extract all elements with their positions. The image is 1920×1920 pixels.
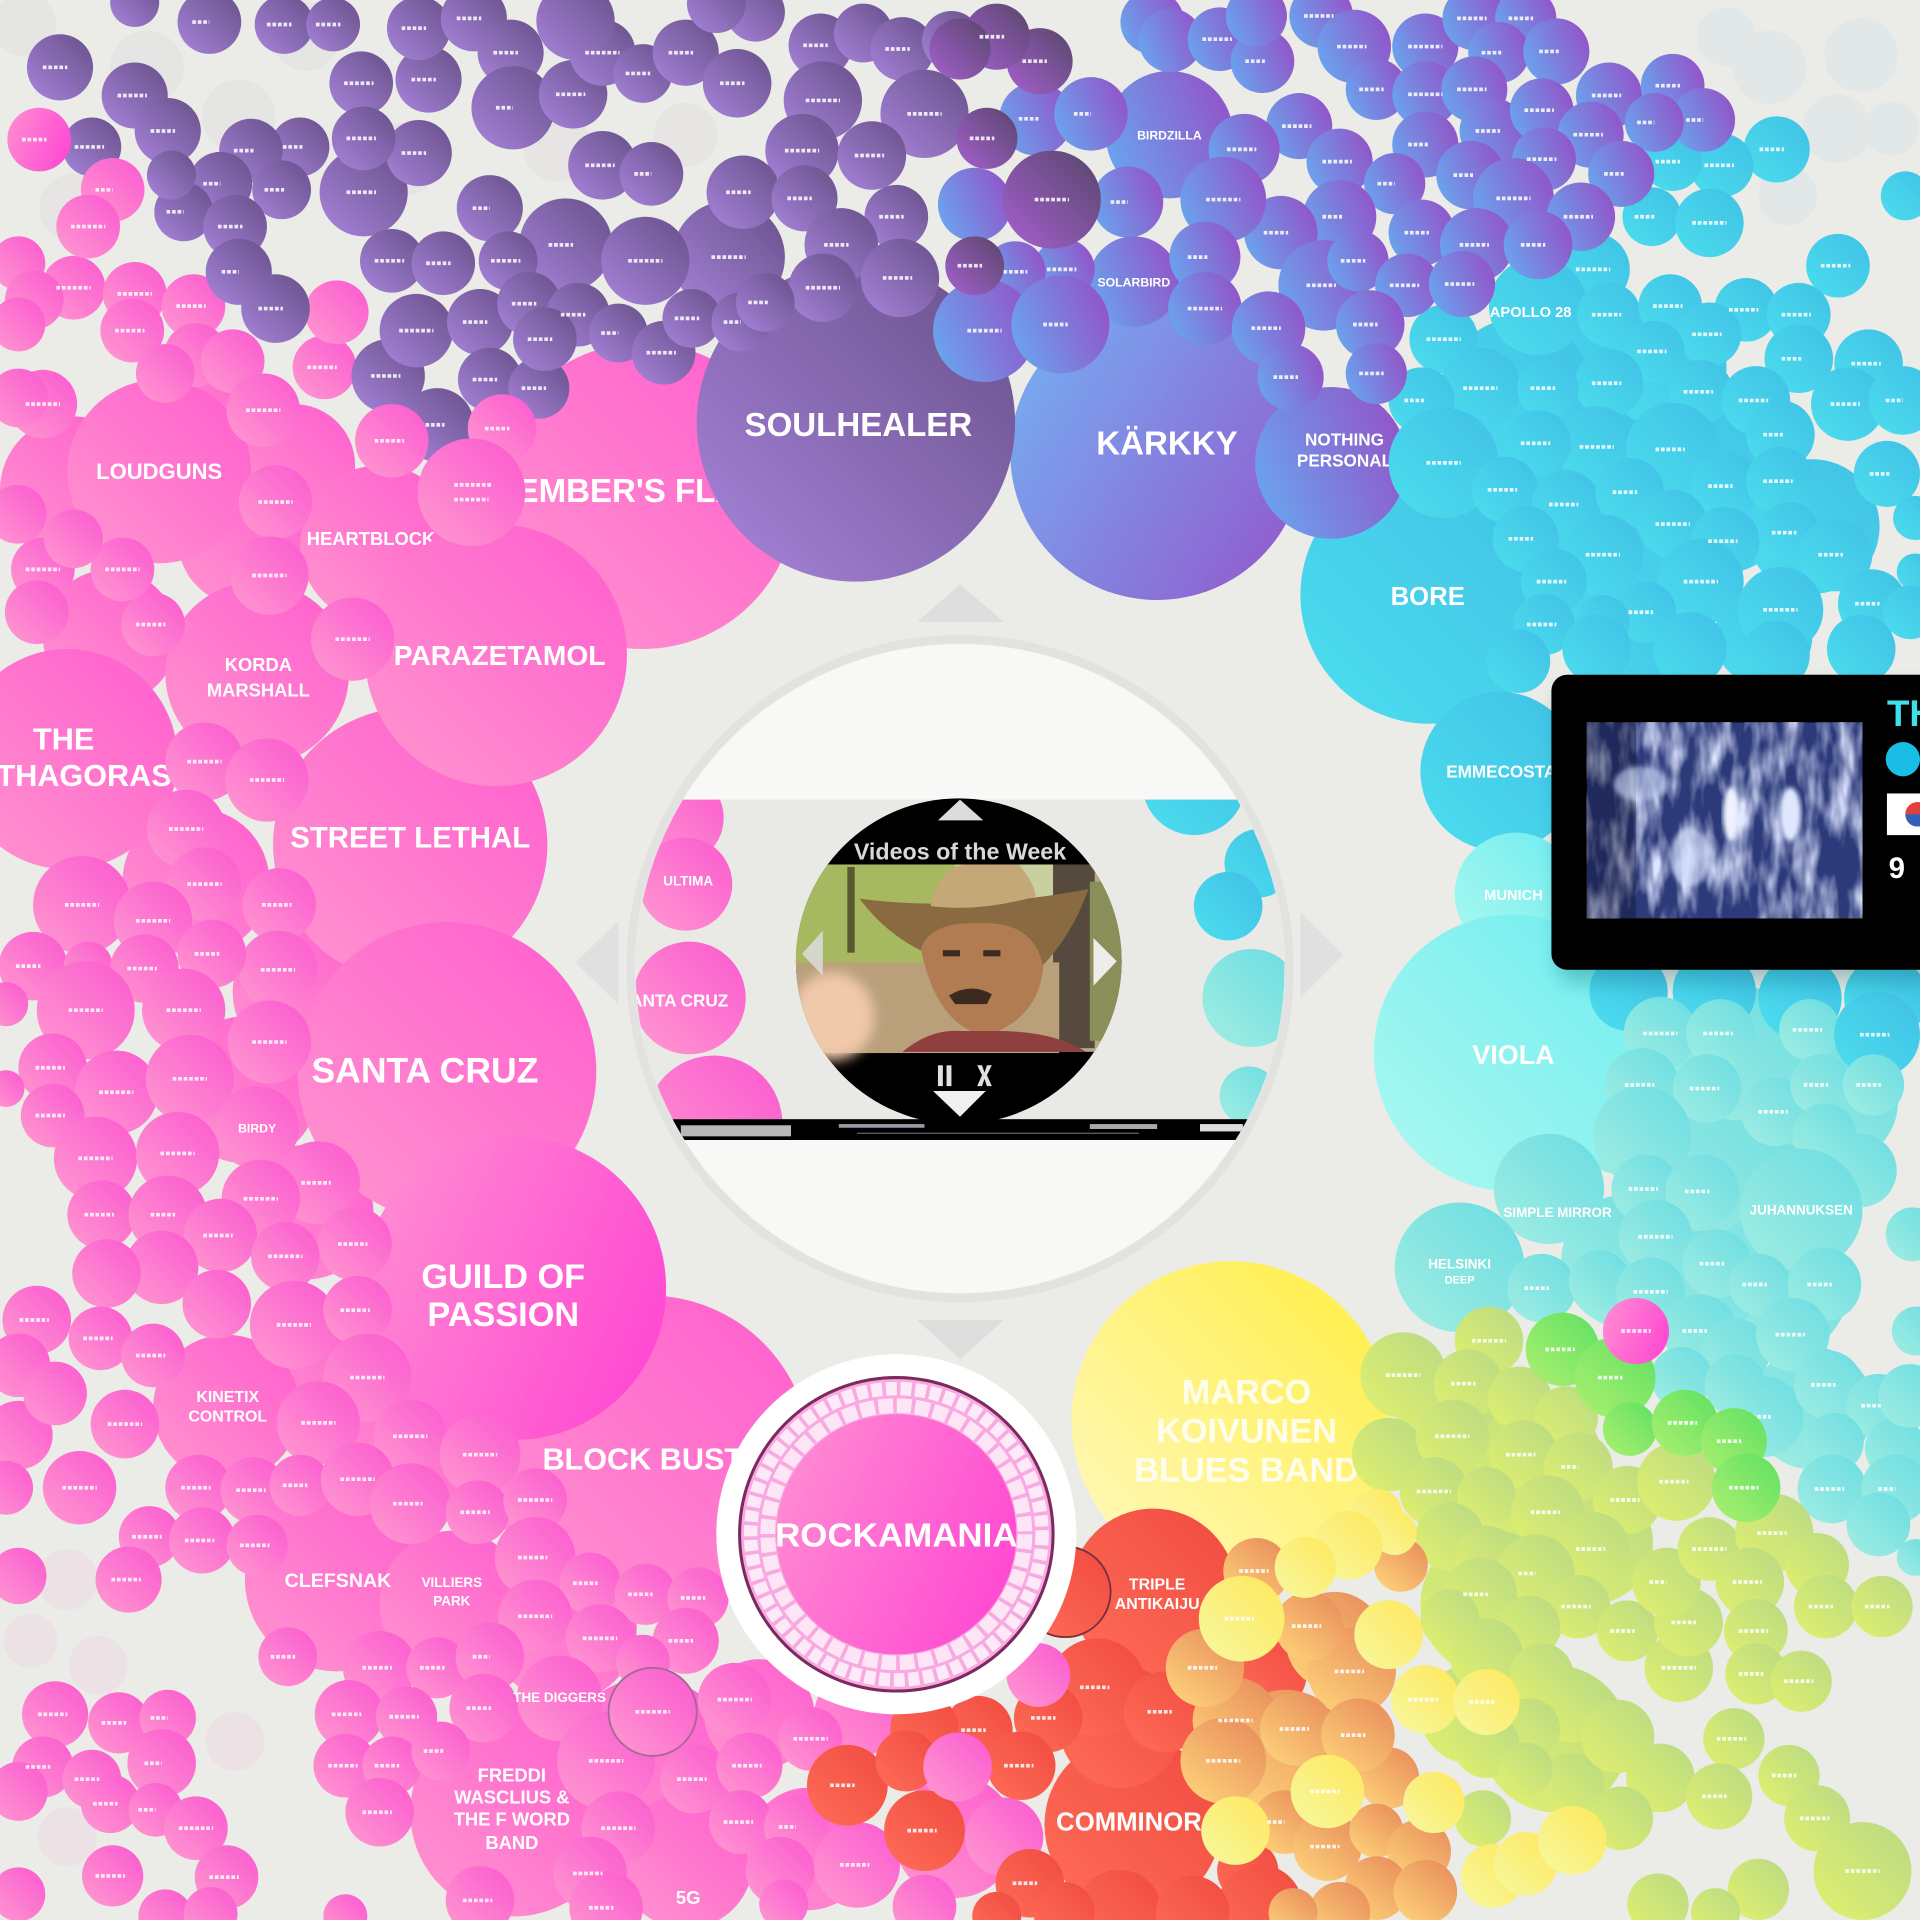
bubble: Emmecosta: EMMECOSTA	[1446, 762, 1556, 782]
bubble: Street Lethal: STREET LETHAL	[290, 821, 530, 854]
bubble: Block Busters: BLOCK BUSTERS	[542, 1442, 806, 1476]
player next arrow	[1093, 938, 1117, 986]
bubble: Nothing Personal: NOTHING	[1305, 430, 1384, 450]
small band names: pink: 5G	[676, 1887, 700, 1908]
purple small bubbles	[27, 0, 981, 462]
small band names: blue-violet: BIRDZILLA	[1137, 129, 1202, 143]
highlighted outlined pink bubble	[609, 1668, 697, 1756]
inner video band: SANTA CRUZ	[619, 991, 728, 1011]
tiny label marks: cyan bubbles	[1404, 149, 1903, 624]
mid-size teal names	[1428, 1203, 1853, 1286]
tiny label marks: overlapping pink bubbles	[22, 140, 509, 500]
bubble: Emmecosta	[1420, 692, 1580, 851]
bubble: Freddi Wasclius	[410, 1708, 618, 1916]
filler teal mass	[1555, 986, 1898, 1469]
filler mid-size pink bubbles	[0, 355, 1016, 1920]
small band name: Apollo 28: APOLLO 28	[1490, 305, 1571, 321]
filler yellow-green mass	[1396, 1359, 1653, 1812]
bubble: Bore: BORE	[1391, 583, 1465, 611]
bubble: Korda Marshall: MARSHALL	[207, 680, 310, 701]
bubble: Triple Antikaiju: TRIPLE	[1129, 1576, 1185, 1593]
bubble: Soulhealer	[697, 263, 1015, 582]
bubble: Korda Marshall: KORDA	[225, 654, 292, 675]
tiny label marks: warm and green bubbles	[830, 1341, 1889, 1883]
bright magenta bubble	[1603, 1298, 1669, 1364]
outlined red bubble behind Rockamania	[1020, 1547, 1111, 1637]
tiny label marks: purple bubbles	[43, 18, 1069, 425]
mid-size teal names: SIMPLE MIRROR	[1503, 1205, 1612, 1220]
bubble: Villiers Park: VILLIERS	[422, 1575, 482, 1590]
pink bubble among the reds	[923, 1733, 992, 1801]
bubble: Soulhealer: SOULHEALER	[745, 407, 972, 444]
bubble: Villiers Park: PARK	[433, 1593, 471, 1608]
bubble: Santa Cruz	[298, 922, 596, 1221]
bubble: Freddi Wasclius: FREDDI	[478, 1765, 546, 1786]
bubble: Kärkky	[1010, 306, 1304, 600]
bubble: Ember's Flame	[490, 343, 796, 649]
mid-size teal names: HELSINKI	[1428, 1257, 1491, 1272]
cyan and teal big bubbles	[1300, 294, 1898, 1469]
tooltip thumbnail	[1587, 722, 1862, 918]
small red bubbles	[807, 1638, 1307, 1920]
small orange bubbles	[1166, 1538, 1457, 1920]
ghost bubbles: faded blue	[1697, 7, 1919, 225]
bubble: Marco Koivunen Blues Band: MARCO	[1182, 1373, 1311, 1411]
bubble: Parazetamol	[365, 524, 627, 786]
filler cyan mass	[1445, 294, 1880, 698]
bubble: Marco Koivunen Blues Band: KOIVUNEN	[1156, 1412, 1337, 1450]
bubble: Nothing Personal	[1255, 387, 1407, 539]
bubble: Clefsnak	[245, 1488, 429, 1671]
inner video band	[636, 800, 1284, 1140]
small bright green bubbles	[1526, 1313, 1780, 1522]
pink bubbles lying over the purple cluster	[7, 108, 536, 546]
filler orange mass	[1224, 1592, 1384, 1812]
small band names: pink: THE DIGGERS	[513, 1690, 606, 1705]
bubble: Freddi Wasclius: WASCLIUS &	[454, 1787, 569, 1808]
bubble: Korda Marshall	[165, 582, 349, 765]
tooltip card	[1551, 675, 1920, 982]
bubble: Loudguns	[67, 380, 251, 563]
Rockamania featured bubble: ROCKAMANIA	[775, 1518, 1018, 1555]
player title: Videos of the Week	[854, 839, 1066, 865]
bubble: Guild of Passion: PASSION	[427, 1296, 579, 1334]
video frame: man in cowboy hat	[784, 864, 1139, 1060]
bubble: Loudguns: LOUDGUNS	[96, 459, 222, 484]
bubble: Marco Koivunen Blues Band: BLUES BAND	[1134, 1452, 1359, 1490]
bubble: Viola: VIOLA	[1472, 1040, 1555, 1070]
mid-size teal names: JUHANNUKSEN	[1750, 1203, 1853, 1218]
name: Clefsnak: CLEFSNAK	[285, 1570, 391, 1592]
small band names: blue-violet: SOLARBIRD	[1098, 276, 1170, 290]
mid-size teal names: DEEP	[1445, 1274, 1475, 1286]
bubble: Freddi Wasclius: THE F WORD	[454, 1809, 570, 1830]
bubble: The Pythagoras	[0, 649, 178, 869]
bubble: Santa Cruz: SANTA CRUZ	[312, 1050, 538, 1090]
tiny label marks: blue-violet bubbles	[967, 16, 1703, 377]
bubble: Villiers Park	[380, 1531, 527, 1678]
bubble: Heartblock: HEARTBLOCK	[307, 528, 436, 549]
bubble: Bore	[1300, 467, 1558, 724]
bubble: Guild of Passion	[362, 1136, 666, 1440]
Rockamania featured bubble	[716, 1354, 1076, 1714]
bubble: Kinetix Control	[153, 1335, 300, 1482]
player previous arrow	[802, 931, 823, 976]
media player bar	[661, 1119, 1261, 1140]
ghost bubbles: faded purple	[0, 0, 718, 242]
player down arrow	[933, 1091, 986, 1117]
bubble: Comminor	[1044, 1665, 1221, 1913]
bubble: Kinetix Control: KINETIX	[196, 1389, 260, 1406]
bubble: Ember's Flame: EMBER'S FLAME	[517, 473, 789, 510]
blue-violet small bubbles	[933, 0, 1735, 410]
small band names: pink: BIRDY	[238, 1122, 276, 1136]
small yellow-green bubbles	[1352, 1307, 1913, 1920]
bubble: Munich: MUNICH	[1484, 888, 1543, 904]
pink bubble under Rockamania	[1007, 1643, 1070, 1707]
bubble: Marco Koivunen Blues Band	[1071, 1261, 1390, 1580]
bubble: Triple Antikaiju: ANTIKAIJU	[1115, 1596, 1200, 1613]
big pink bubbles with names	[0, 343, 1016, 1920]
arrow: top navigation ghost	[917, 584, 1004, 622]
bubble: Kärkky: KÄRKKY	[1096, 425, 1238, 462]
tiny label marks: teal bubbles	[1524, 1030, 1896, 1489]
bubble: Street Lethal	[273, 708, 547, 982]
bubble: The Pythagoras: THE	[33, 722, 94, 756]
bubble: Guild of Passion: GUILD OF	[421, 1258, 585, 1296]
bubble: Triple Antikaiju	[1070, 1509, 1237, 1675]
bubble: Kinetix Control: CONTROL	[188, 1409, 267, 1426]
darker purple small bubbles	[929, 4, 1101, 295]
arrow: right navigation ghost	[1300, 912, 1343, 998]
bubble: Heartblock	[300, 465, 459, 624]
decorative ring of small circles	[751, 1389, 1042, 1680]
bubble: Viola	[1374, 915, 1651, 1191]
player up arrow	[938, 800, 983, 820]
tiny label marks: pink bubbles	[16, 288, 869, 1908]
inner video band: ULTIMA	[663, 873, 713, 888]
small cyan bubbles	[1389, 116, 1920, 1040]
small band names: pink	[238, 1122, 700, 1908]
circular video player	[796, 798, 1122, 1120]
ghost bubbles: faded pink	[4, 1549, 264, 1866]
tooltip genre dot	[1886, 742, 1920, 776]
bubble: Freddi Wasclius: BAND	[485, 1832, 538, 1853]
bubble: Parazetamol: PARAZETAMOL	[394, 640, 605, 671]
tooltip flag	[1887, 793, 1920, 835]
small pink bubbles	[0, 236, 1043, 1920]
small band names: blue-violet	[1098, 129, 1202, 290]
player pause and close icons	[938, 1065, 992, 1086]
bubble: Nothing Personal: PERSONAL	[1297, 451, 1392, 471]
bubble: Block Busters	[487, 1296, 811, 1619]
bubble: Comminor: COMMINOR	[1056, 1809, 1202, 1837]
bubble: Munich	[1455, 833, 1577, 955]
arrow: bottom navigation ghost	[917, 1320, 1004, 1359]
arrow: left navigation ghost	[576, 921, 618, 1004]
small yellow bubbles	[1199, 1489, 1607, 1908]
centre video lens	[612, 639, 1310, 1298]
small teal bubbles	[1395, 992, 1920, 1576]
tooltip count: 9	[1889, 852, 1905, 885]
